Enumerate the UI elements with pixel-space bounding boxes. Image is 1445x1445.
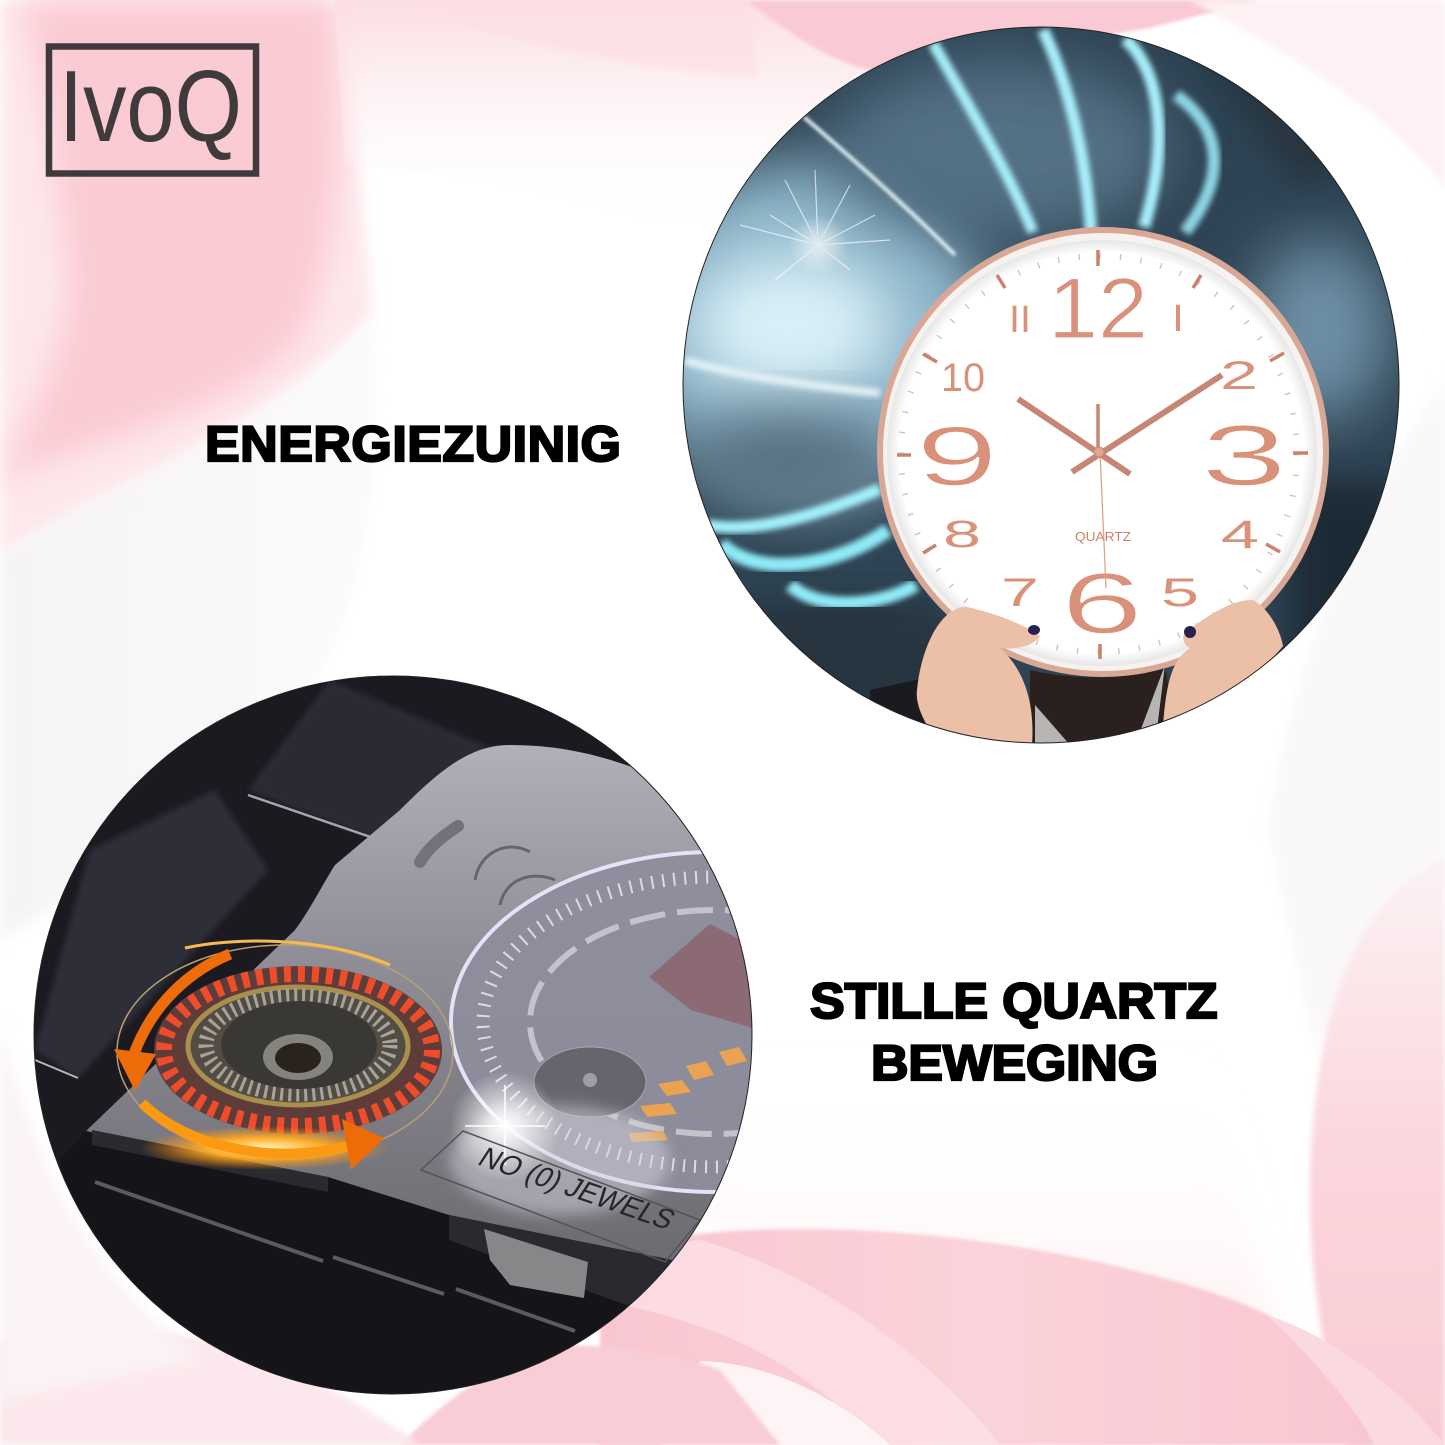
numerals [924,278,1280,634]
numerals: 4 [1221,513,1259,557]
logo: IvoQ: IvoQ [59,51,242,163]
numerals: 9 [916,409,998,503]
numerals: 12 [1048,261,1148,357]
numerals: I [1172,298,1184,340]
icon: light flare [740,170,890,280]
quartz label: QUARTZ [1075,530,1131,544]
motor coil [114,941,453,1170]
white ring dial [444,850,752,1222]
numerals: 6 [1061,556,1143,652]
numerals: 8 [943,514,981,556]
photo frame: clock [683,27,1399,743]
label on movement: NO (0) JEWELS [472,1142,681,1236]
clock hands [1018,375,1222,588]
heading: stille quartz beweging: STILLE QUARTZ [810,973,1218,1029]
photo: quartz movement [34,676,752,1394]
photo frame: movement [34,676,752,1394]
numerals: 5 [1161,571,1199,615]
heading: stille quartz beweging [810,973,1218,1091]
movement body [86,745,760,1280]
rotation arrows [114,954,384,1170]
label on movement [421,1131,700,1262]
heading: stille quartz beweging: BEWEGING [871,1035,1158,1091]
numerals: 3 [1201,408,1287,504]
numerals: 7 [1001,571,1039,615]
photo: wall clock held by hands [630,25,1405,750]
numerals: 2 [1220,354,1258,398]
hands holding the clock [870,600,1283,745]
clock dial [877,227,1329,677]
heading: energiezuinig: ENERGIEZUINIG [205,416,621,472]
numerals: II [1009,299,1031,341]
numerals: 10 [941,356,985,400]
